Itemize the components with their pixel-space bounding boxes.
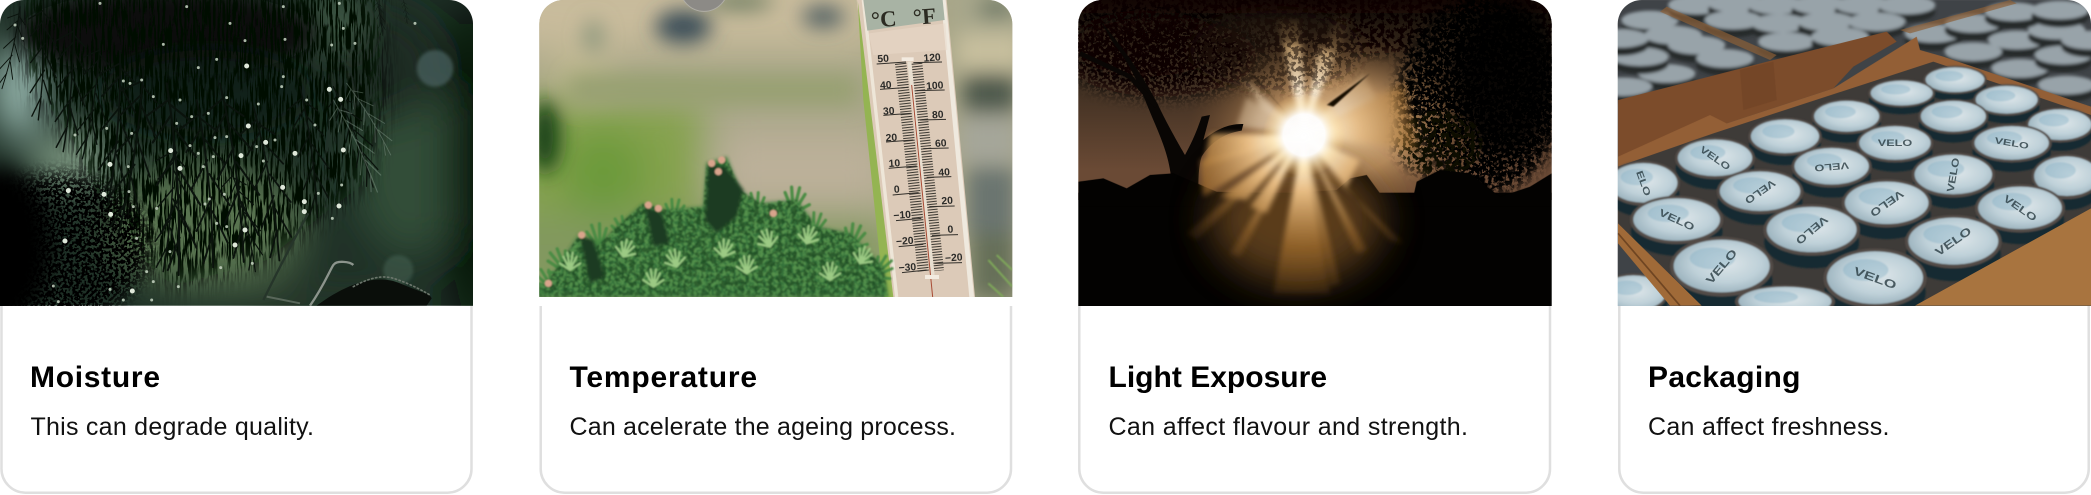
thermometer scale labels: 0 xyxy=(947,224,954,236)
panel: light exposure xyxy=(1050,0,1583,493)
thermometer scale labels xyxy=(870,3,963,274)
photo: wet pine branches with droplets xyxy=(0,0,473,306)
thermometer scale labels: 40 xyxy=(880,80,892,92)
can lid labels xyxy=(1634,136,2039,292)
can lid labels: VELO xyxy=(1994,136,2030,152)
thermometer scale labels: 20 xyxy=(941,196,954,207)
can lid labels: ELO xyxy=(1634,170,1652,198)
card outline: temperature xyxy=(541,306,1011,493)
card outline: moisture xyxy=(1,300,472,493)
thermometer scale labels: 30 xyxy=(883,106,895,118)
panel: moisture xyxy=(0,0,497,493)
heading: Temperature: Temperature xyxy=(570,361,757,394)
heading: Moisture: Moisture xyxy=(30,361,160,394)
thermometer scale labels: 50 xyxy=(877,54,890,65)
thermometer scale labels: °C xyxy=(870,6,897,33)
description: temperature: Can acelerate the ageing process. xyxy=(570,413,956,441)
can lid labels: VELO xyxy=(2001,193,2039,224)
panel: temperature xyxy=(497,0,1023,493)
lower sun rays xyxy=(1187,83,1417,293)
can lid labels: VELO xyxy=(1933,224,1974,259)
photo: cardboard boxes of cans xyxy=(1618,0,2091,306)
can lid labels: VELO xyxy=(1742,177,1777,205)
thermometer scale labels: −20 xyxy=(945,252,963,265)
can lid labels: VELO xyxy=(1814,160,1849,173)
thermometer scale labels: 80 xyxy=(932,110,944,121)
upper sun rays xyxy=(1236,18,1374,132)
thermometer scale labels: 100 xyxy=(926,80,944,93)
description: light exposure: Can affect flavour and strength. xyxy=(1108,413,1468,441)
thermometer scale labels: 0 xyxy=(894,184,900,196)
description: moisture: This can degrade quality. xyxy=(30,413,314,441)
can lid labels: VELO xyxy=(1793,213,1830,247)
can lid labels: VELO xyxy=(1703,247,1740,286)
thermometer scale labels: −10 xyxy=(893,210,912,222)
heading: Packaging: Packaging xyxy=(1648,361,1800,394)
thermometer scale labels: 10 xyxy=(888,158,901,170)
can lid labels: VELO xyxy=(1878,139,1913,149)
card outline: packaging xyxy=(1619,300,2089,493)
photo: sunburst through tree silhouettes xyxy=(1078,0,1552,306)
thermometer scale labels: °F xyxy=(912,3,937,30)
tree canopy xyxy=(1078,0,1552,193)
can lid labels: VELO xyxy=(1698,145,1732,173)
blurred rear boxes xyxy=(1591,0,2091,104)
rosemary shrub xyxy=(527,157,1012,300)
can lid labels: VELO xyxy=(1657,207,1696,233)
thermometer scale labels: −30 xyxy=(898,262,917,274)
thermometer scale labels: 20 xyxy=(885,133,898,144)
description: packaging: Can affect freshness. xyxy=(1648,413,1890,441)
thermometer scale labels: 40 xyxy=(938,167,951,179)
can lid labels: VELO xyxy=(1852,265,1898,292)
heading: Light Exposure: Light Exposure xyxy=(1108,361,1327,394)
thermometer scale labels: 60 xyxy=(935,138,947,150)
cans xyxy=(1618,65,2091,306)
panel: packaging xyxy=(1591,0,2091,493)
photo: thermometer and green shrub xyxy=(539,0,1012,297)
can lid labels: VELO xyxy=(1946,157,1962,193)
thermometer scale labels: 120 xyxy=(923,52,941,65)
card outline: light exposure xyxy=(1079,300,1550,493)
thermometer scale labels: −20 xyxy=(896,236,914,248)
can lid labels: VELO xyxy=(1867,188,1906,219)
